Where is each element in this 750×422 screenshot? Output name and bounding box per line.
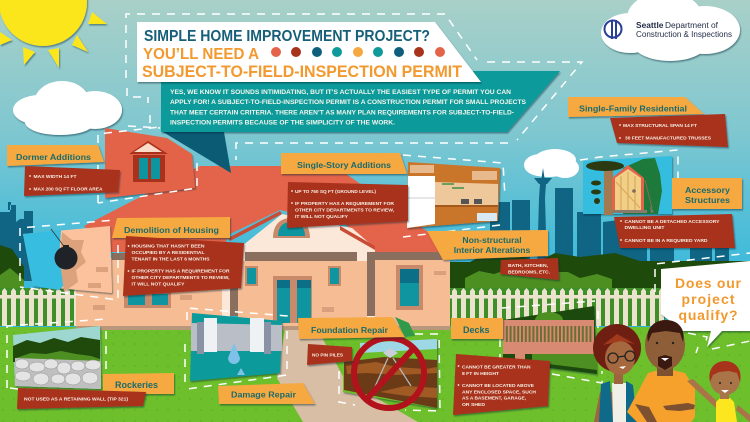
body of house (76, 258, 450, 326)
roof edge (228, 211, 375, 250)
panel: decks illustration (503, 306, 597, 374)
panel: non-structural interior alterations (427, 230, 559, 280)
panel: foundation repair labels (298, 317, 405, 365)
list (453, 354, 550, 415)
walkway (277, 330, 418, 422)
tail of intro callout (163, 132, 231, 173)
bubble text: qualify? (678, 307, 738, 323)
list: ANY ENCLOSED SPACE, SUCH (462, 389, 537, 394)
panel: kitchen illustration (407, 162, 500, 228)
text block: intro: THAT MEET CERTAIN CRITERIA. THERE AREN’T AS MANY PLAN REQUIREMENTS FOR SUBJECT-TO-FIELD- (170, 110, 514, 116)
tag: Interior Alterations (454, 245, 530, 255)
icon: sun (0, 0, 107, 68)
list: AS A BASEMENT, GARAGE, (462, 396, 526, 401)
tag: accessory structures (672, 178, 742, 209)
list: MAX STRUCTURAL SPAN 14 FT (623, 123, 697, 128)
panel: demolition of housing labels (112, 217, 244, 296)
panel: dormer additions labels (7, 145, 120, 196)
list: BATH, KITCHEN, (508, 263, 548, 268)
icon: space needle (534, 168, 552, 269)
list (24, 166, 120, 196)
list (123, 236, 244, 296)
list: accessory: DWELLING UNIT (624, 225, 665, 230)
bubble text (675, 275, 742, 323)
tag (103, 373, 174, 394)
list: HOUSING THAT HASN’T BEEN (132, 244, 205, 248)
tag: accessory structures: Structures (685, 195, 730, 205)
list: UP TO 750 SQ FT (GROUND LEVEL) (295, 189, 376, 194)
chimney (224, 182, 241, 217)
list (610, 114, 728, 147)
list: IT WILL NOT QUALIFY (132, 282, 184, 286)
list: 30 FEET MANUFACTURED TRUSSES (625, 136, 711, 140)
grass lawn (0, 327, 750, 422)
speech bubble (661, 261, 750, 347)
list: OTHER CITY DEPARTMENTS TO REVIEW, (295, 208, 394, 212)
list: BEDROOMS, ETC. (508, 270, 550, 274)
dashed frame around accessory (580, 150, 678, 208)
text block: intro: APPLY FOR! A SUBJECT-TO-FIELD-INSPECTION PERMIT IS A CONSTRUCTION PERMIT FOR SMALL PROJECTS (170, 99, 526, 106)
windows (124, 265, 423, 310)
panel: dormer additions illustration (105, 128, 195, 198)
person: man (627, 320, 695, 422)
icon: dormer window (129, 141, 168, 182)
bricks (93, 271, 446, 312)
tag: Rockeries (115, 380, 158, 390)
list: accessory (614, 214, 735, 248)
brown trim (112, 252, 450, 316)
list: NOT USED AS A RETAINING WALL (TIP 321) (24, 396, 128, 402)
tag: Single-Story Additions (297, 160, 391, 170)
tag: Decks (463, 325, 490, 335)
tag (427, 230, 548, 260)
tag: Dormer Additions (16, 152, 91, 162)
foundation strip (76, 326, 450, 330)
skyline (0, 188, 729, 282)
icon: water drops (228, 343, 245, 375)
panel: accessory structure illustration (583, 156, 672, 215)
trees (0, 245, 750, 301)
door (273, 276, 312, 323)
tag (568, 97, 704, 117)
panel: rockeries illustration (13, 326, 101, 389)
list: CANNOT BE LOCATED ABOVE (462, 383, 534, 388)
list: accessory: CANNOT BE A DETACHED ACCESSORY (624, 219, 720, 224)
tag: Single-Family Residential (579, 104, 687, 114)
gable wall (222, 214, 375, 326)
panel: intro text (161, 71, 560, 132)
list: 8 FT IN HEIGHT (462, 371, 499, 376)
tree (586, 161, 624, 215)
panel: single-story additions labels (281, 153, 408, 228)
logo cloud: Construction & Inspections (636, 30, 732, 39)
heading: main title: SIMPLE HOME IMPROVEMENT PROJECT? (144, 28, 430, 45)
list: MAX WIDTH 14 FT (34, 174, 77, 179)
list: accessory: CANNOT BE IN A REQUIRED YARD (624, 238, 708, 243)
panel: demolition illustration (23, 226, 112, 293)
list: IF PROPERTY HAS A REQUIREMENT FOR (295, 201, 395, 206)
list: OCCUPIED BY A RESIDENTIAL (132, 250, 205, 255)
person: child (687, 361, 750, 422)
tag: damage repair: Damage Repair (231, 390, 297, 400)
icon: shed (612, 165, 654, 213)
tag: Foundation Repair (311, 325, 389, 335)
dashed frame around title (126, 14, 582, 160)
shrub by foundation (395, 317, 415, 337)
list (17, 388, 146, 409)
logo text: Seattle Department of (636, 21, 719, 30)
cloud left (13, 81, 122, 135)
roof (84, 166, 445, 254)
panel: rockeries labels (17, 373, 174, 409)
bubble text: Does our (675, 275, 742, 291)
person: woman (593, 324, 641, 422)
cloud behind space needle (524, 149, 579, 178)
icon: wrecking ball (51, 229, 78, 270)
list (287, 182, 408, 228)
fence (0, 288, 665, 326)
panel: title (137, 22, 481, 82)
decorative dots (271, 47, 445, 57)
tag: Demolition of Housing (124, 225, 219, 235)
logo cloud (601, 0, 740, 61)
icon: prohibited sign (354, 338, 424, 408)
list: OTHER CITY DEPARTMENTS TO REVIEW, (132, 275, 230, 280)
heading: permit name: SUBJECT-TO-FIELD-INSPECTION PERMIT (142, 63, 462, 81)
dashed frame around speech bubble (655, 253, 750, 353)
panel: foundation repair illustration (343, 338, 437, 408)
tag: Non-structural (462, 235, 522, 245)
list: NO PIN PILES (312, 352, 343, 358)
list: TENANT IN THE LAST 6 MONTHS (132, 256, 210, 262)
panel: decks labels (451, 318, 550, 415)
icon: seal (604, 20, 622, 39)
list: MAX 200 SQ FT FLOOR AREA (34, 186, 103, 192)
panel: damage repair illustration (190, 313, 282, 381)
arched window (273, 218, 310, 238)
list: IF PROPERTY HAS A REQUIREMENT FOR (132, 268, 230, 274)
list: CANNOT BE GREATER THAN (462, 364, 531, 370)
tag: accessory structures: Accessory (685, 185, 730, 195)
list: IT WILL NOT QUALIFY (295, 214, 348, 219)
list (500, 258, 559, 280)
text block: intro: YES, WE KNOW IT SOUNDS INTIMIDATING, BUT IT’S ACTUALLY THE EASIEST TYPE OF PERMIT YOU CAN (170, 89, 512, 96)
list: OR SHED (462, 402, 486, 407)
tag: damage repair (218, 383, 315, 404)
heading: you'll need a: YOU’LL NEED A (143, 46, 259, 63)
house (76, 166, 450, 330)
text block: intro: INSPECTION PERMITS BECAUSE OF THE SIMPLICITY OF THE WORK. (170, 120, 395, 126)
sky background (0, 0, 750, 330)
text block: intro (170, 89, 526, 126)
fridge (407, 176, 435, 228)
bubble text: project (682, 291, 735, 307)
panel: single-family residential (568, 97, 728, 147)
icon: pin pile (373, 348, 411, 391)
